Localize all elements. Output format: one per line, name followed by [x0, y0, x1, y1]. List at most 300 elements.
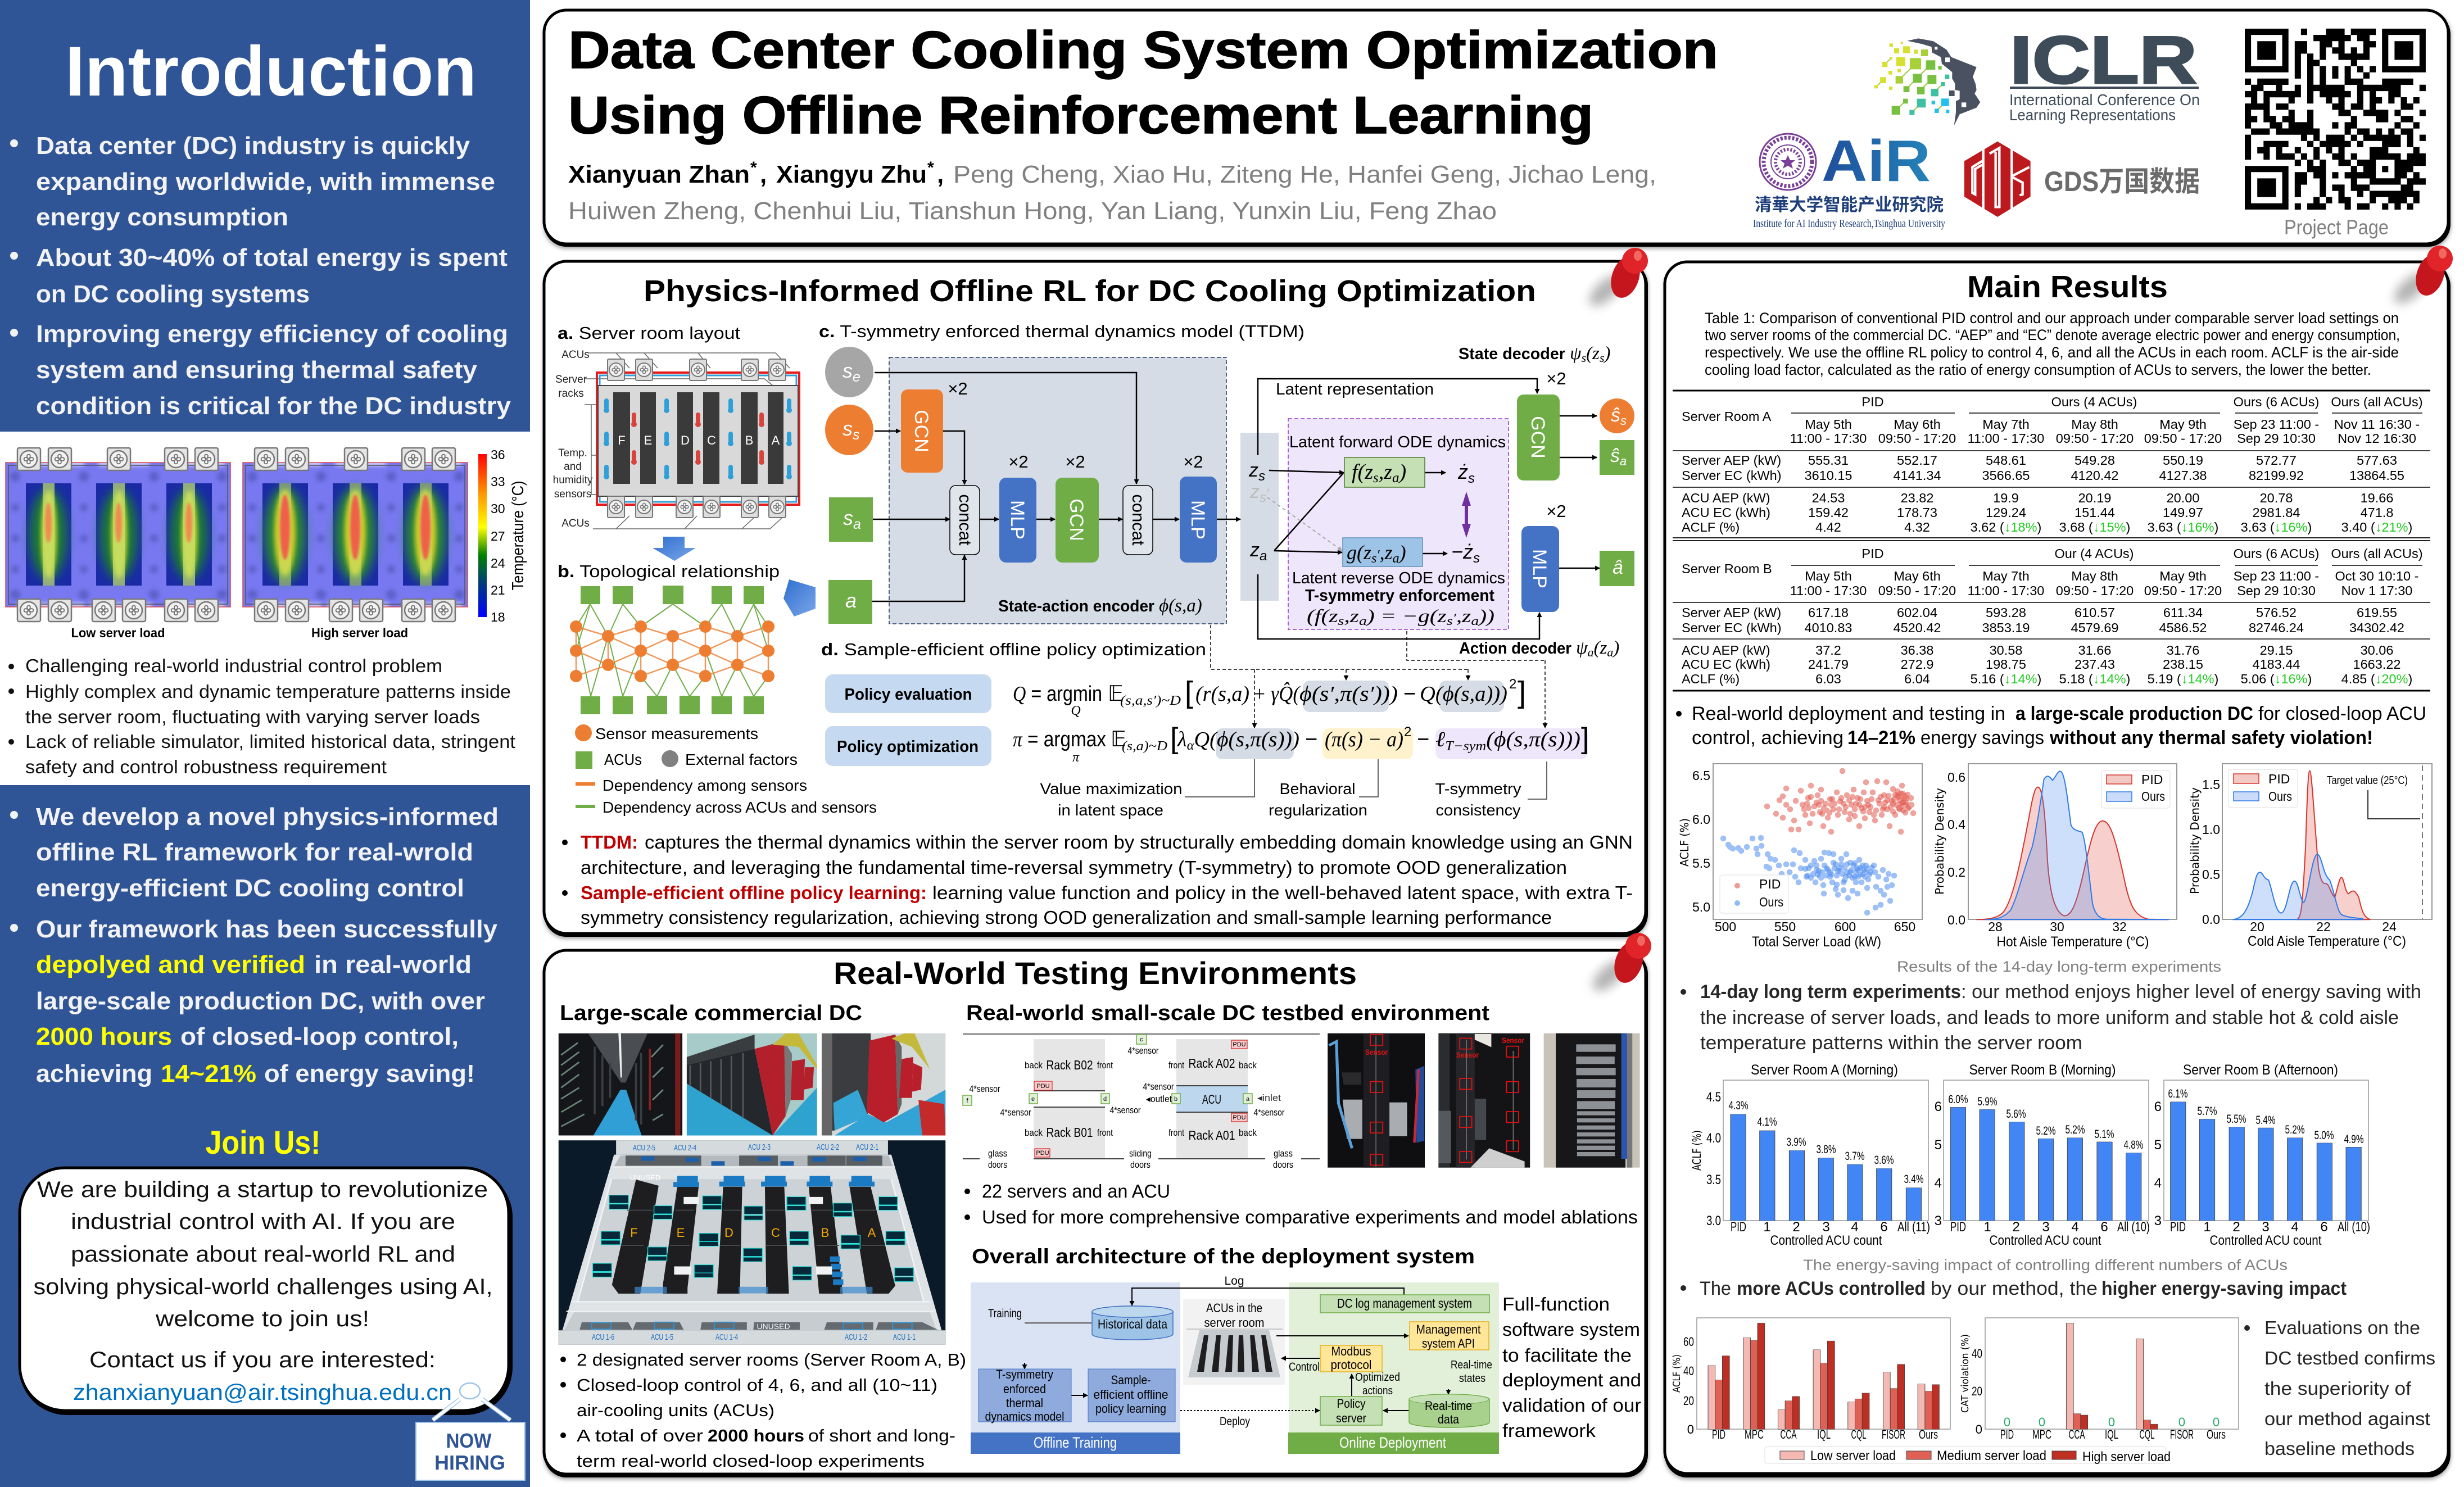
table: comparison: ACLF (%) — [1682, 672, 1740, 686]
box: g dynamics: g(z — [1347, 541, 1371, 564]
chart: CAT violation by method: 0 — [2213, 1415, 2220, 1429]
table: comparison: 5.18 (↓14%) — [2059, 672, 2130, 686]
chart: server room B afternoon bars: 6 — [2154, 1099, 2162, 1114]
box: policy server: Policy — [1337, 1397, 1366, 1411]
chart: TTDM architecture: s — [1620, 414, 1627, 428]
icon: red pin — [1584, 248, 1648, 311]
table: comparison: 09:50 - 17:20 — [2056, 431, 2134, 446]
chart: cold aisle temperature density: 20 — [2250, 919, 2264, 934]
table: comparison: 5.06 (↓16%) — [2241, 672, 2312, 686]
table: comparison: 3.63 (↓16%) — [2148, 520, 2218, 534]
chart: temperature colour bar: 18 — [491, 610, 505, 624]
text block: challenges bullets — [8, 655, 515, 777]
chart: temperature colour bar: 27 — [491, 529, 505, 543]
chart: hot aisle temperature density: 0.2 — [1947, 865, 1965, 879]
chart: testbed rack layout: front — [1168, 1060, 1184, 1071]
text block: table caption: cooling load factor, calculated as the ratio of energy consumption of ACUs to servers, the lower the better. — [1705, 361, 2371, 378]
label: latent reverse and T-symmetry: (f(z — [1307, 606, 1331, 627]
text block: full-function software system — [1502, 1294, 1641, 1441]
chart: TTDM architecture: s — [843, 506, 853, 529]
table: comparison: Ours (6 ACUs) — [2234, 395, 2319, 409]
text block: deployment result bullet: energy savings — [1921, 727, 2044, 749]
table: comparison: 30.58 — [1990, 643, 2022, 658]
chart: testbed rack layout: front — [1097, 1060, 1113, 1071]
text block: challenges bullets: Challenging real-world industrial control problem — [25, 655, 442, 676]
labels: flows: actions — [1362, 1385, 1393, 1397]
chart: ACLF by method: CQL — [1851, 1427, 1866, 1441]
chart: hot aisle temperature density — [1933, 764, 2177, 950]
labels: objective terms — [1040, 780, 1521, 819]
chart: hot aisle temperature density: 28 — [1988, 919, 2003, 934]
chart: server room B morning bars: 6 — [1935, 1099, 1942, 1114]
output node: action estimate — [1600, 551, 1634, 586]
text block: authors: , — [937, 161, 944, 188]
label: state decoder: s — [1582, 351, 1586, 365]
formula: policy evaluation — [1013, 676, 1526, 718]
label: state decoder: State decoder ψ — [1459, 343, 1582, 364]
chart: server room B afternoon bars — [2154, 1062, 2370, 1248]
labels: latent states — [1248, 460, 1270, 564]
box: T-symmetry model: enforced — [1003, 1382, 1046, 1396]
chart: CAT violation by method: 40 — [1972, 1347, 1982, 1361]
formula: policy evaluation: Q = argmin — [1013, 682, 1102, 706]
chart: TTDM architecture — [825, 343, 1634, 659]
chart: testbed rack layout: back — [1025, 1060, 1043, 1071]
chart: CAT violation by method: MPC — [2032, 1427, 2051, 1441]
chart: testbed rack layout: Rack B02 — [1047, 1058, 1093, 1072]
chart: TTDM architecture: s — [853, 427, 860, 443]
text block: TTDM and policy bullets: captures the thermal dynamics within the server room by structurally embedding domain knowledge using an GNN — [645, 832, 1633, 853]
chart: server room 3D render: A — [868, 1226, 876, 1240]
chart: testbed rack layout: ◂outlet — [1146, 1094, 1172, 1104]
chart: CAT violation by method — [1959, 1318, 2239, 1441]
text block: challenges bullets: safety and control robustness requirement — [25, 756, 387, 777]
chart: ACLF by method: 0 — [1687, 1422, 1694, 1436]
labels: objective terms: Value maximization — [1040, 780, 1183, 797]
labels: flows: Real-time — [1451, 1359, 1492, 1371]
text block: testbed evaluation bullet: DC testbed confirms — [2264, 1348, 2435, 1368]
heading: deployment architecture: Overall architecture of the deployment system — [972, 1245, 1475, 1268]
box: sample-efficient policy: Sample- — [1111, 1373, 1151, 1387]
chart: cold aisle temperature density: Target value (25°C) — [2327, 774, 2408, 787]
panel: physics-informed offline RL — [544, 248, 1648, 939]
chart: CAT violation by method: 0 — [1976, 1422, 1982, 1436]
labels: latent states: a — [1260, 548, 1267, 564]
chart: server room B morning bars: 5.6% — [2006, 1108, 2026, 1121]
table: comparison: May 8th — [2071, 569, 2118, 583]
chart: CAT violation by method: 20 — [1972, 1384, 1982, 1398]
labels: multiplicity: ×2 — [1183, 452, 1203, 472]
chart: server room layout: sensors — [554, 488, 591, 500]
text block: 14-day experiments bullet: 14-day long term experiments — [1700, 981, 1961, 1003]
chart: testbed rack layout: front — [1097, 1127, 1113, 1138]
table: comparison: 4120.42 — [2071, 468, 2118, 483]
panel: real-world testing environments — [544, 933, 1651, 1479]
formula: policy optimization: ϕ(s,π(s))) — [1217, 728, 1299, 751]
text block: deployment result bullet: control, achieving — [1692, 727, 1844, 749]
panel: latent ODE dynamics — [1288, 419, 1509, 629]
box: f dynamics — [1344, 457, 1425, 487]
text block: intro bullets: expanding worldwide, with immense — [36, 168, 495, 196]
chart: hot aisle temperature density: Ours — [2141, 789, 2165, 804]
box: T-symmetry model: thermal — [1006, 1396, 1043, 1410]
chart: server room layout: humidity — [553, 474, 593, 486]
table: comparison: 82746.24 — [2249, 620, 2304, 635]
label: action decoder: a — [1588, 645, 1594, 659]
chart: TTDM architecture: a — [853, 516, 861, 532]
table: comparison: 550.19 — [2163, 453, 2203, 468]
table: comparison: Ours (4 ACUs) — [2051, 395, 2137, 409]
chart: hot aisle temperature density: Hot Aisle Temperature (°C) — [1996, 934, 2149, 950]
chart: testbed rack layout: 4*sensor — [1127, 1045, 1159, 1056]
table: comparison: 237.43 — [2075, 657, 2115, 672]
chart: testbed rack layout: back — [1025, 1127, 1043, 1138]
text block: intro bullets: on DC cooling systems — [36, 280, 310, 308]
table: comparison: 11:00 - 17:30 — [1790, 583, 1867, 598]
table: comparison: 5.19 (↓14%) — [2148, 672, 2218, 686]
table: comparison: 572.77 — [2256, 453, 2297, 468]
table: comparison: 09:50 - 17:20 — [2144, 583, 2222, 598]
blocks: encoder and decoder networks: MLP — [1529, 549, 1550, 588]
legend: topology: Dependency across ACUs and sensors — [603, 799, 877, 816]
title — [568, 20, 1718, 144]
chart: testbed rack layout: front — [1168, 1127, 1184, 1138]
label: latent reverse and T-symmetry: )) — [1478, 606, 1494, 627]
formula: policy optimization — [1013, 722, 1589, 765]
chart: server room B morning bars: 1 — [1983, 1219, 1991, 1235]
chart: server room A morning bars: 4 — [1851, 1219, 1859, 1235]
label: latent reverse and T-symmetry: ,z — [1344, 606, 1359, 627]
panel: ACUs in server room: server room — [1204, 1316, 1265, 1330]
formula: policy evaluation: Q — [1071, 704, 1081, 718]
formula: policy evaluation: Q(ϕ(s,a))) — [1420, 682, 1507, 706]
table: comparison: 4586.52 — [2159, 620, 2207, 635]
box: g dynamics — [1343, 538, 1423, 566]
chart: testbed rack layout: back — [1239, 1060, 1257, 1071]
chart: ACLF vs total server load scatter: 6.0 — [1692, 812, 1710, 827]
title: Using Offline Reinforcement Learning — [568, 85, 1593, 144]
table: comparison: 20.00 — [2167, 491, 2199, 505]
chart: ACLF vs total server load scatter: ACLF (%) — [1678, 818, 1691, 867]
formula: policy optimization: − — [1417, 728, 1429, 751]
photos: testbed racks with sensors — [1328, 1033, 1640, 1168]
label: state decoder: (z — [1586, 343, 1600, 364]
table: comparison: 593.28 — [1986, 605, 2026, 620]
formula: policy optimization: (s,a)~D — [1122, 739, 1167, 754]
labels: multiplicity: ×2 — [948, 379, 968, 398]
formula: policy optimization: ] — [1581, 722, 1589, 755]
chart: deployment architecture diagram — [971, 1275, 1499, 1454]
chart: server room B morning bars: 5.9% — [1977, 1095, 1998, 1108]
text block: testbed evaluation bullet: the superiority of — [2264, 1378, 2412, 1399]
table: comparison: May 6th — [1894, 569, 1941, 583]
text block: full-function software system: Full-function — [1502, 1294, 1610, 1314]
text block: table caption: Table 1: Comparison of conventional PID control and our approach under comparable server load settings on — [1705, 310, 2399, 327]
table: comparison: 23.82 — [1901, 491, 1933, 505]
table: comparison: 36.38 — [1901, 643, 1933, 658]
text block: contributions: 2000 hours — [36, 1023, 172, 1050]
heading: Introduction: Introduction — [65, 33, 477, 111]
table: comparison: Ours (all ACUs) — [2331, 395, 2423, 409]
box: g dynamics: ) — [1398, 541, 1406, 564]
text block: testbed evaluation bullet: our method against — [2264, 1408, 2430, 1429]
labels: latent states: s — [1260, 490, 1266, 505]
text block: TTDM and policy bullets: TTDM: — [581, 832, 638, 853]
chart: server room layout: racks — [558, 388, 584, 400]
text block: intro bullets: condition is critical for the DC industry — [36, 392, 511, 420]
chart: ACLF vs total server load scatter: PID — [1759, 877, 1781, 891]
chart: server room 3D render: ACU 2-1 — [856, 1143, 878, 1152]
labels: multiplicity: ×2 — [1546, 501, 1566, 521]
blocks: encoder and decoder networks: MLP — [1007, 500, 1028, 540]
chart: ACLF by method: Ours — [1919, 1427, 1938, 1441]
table: comparison: 602.04 — [1897, 605, 1937, 620]
text block: deployment result bullet — [1676, 703, 2426, 749]
table: comparison: 11:00 - 17:30 — [1968, 583, 2044, 598]
chart: server room B afternoon bars: 5.5% — [2227, 1113, 2246, 1126]
box: T-symmetry model — [979, 1367, 1071, 1423]
text block: contributions: 14~21% — [161, 1060, 256, 1087]
text block: testbed bullets: Used for more comprehensive comparative experiments and model ablations — [982, 1207, 1638, 1227]
table: comparison: Nov 11 16:30 - — [2334, 417, 2420, 432]
chart: server room B afternoon bars: 5.7% — [2198, 1105, 2217, 1118]
chart: server room A morning bars: 3.8% — [1817, 1143, 1836, 1156]
table: comparison: ACLF (%) — [1682, 520, 1740, 534]
chart: cold aisle temperature density: Probability Density — [2188, 787, 2202, 894]
chart: ACLF by method: 60 — [1683, 1335, 1694, 1349]
chart: server room 3D render: ACU 1-4 — [715, 1332, 738, 1342]
chart: server room B morning bars: All (10) — [2117, 1219, 2150, 1235]
chart: server room B morning bars: 2 — [2012, 1219, 2020, 1235]
text block: deployment result bullet: a large-scale production DC — [2015, 703, 2253, 724]
box: management API: system API — [1422, 1336, 1475, 1350]
icon: AIR logo: AiR — [1822, 129, 1931, 194]
chart: server room 3D render: UNUSED — [757, 1322, 790, 1331]
table: comparison: ACU AEP (kW) — [1682, 491, 1770, 505]
chart: CAT violation by method: IQL — [2105, 1427, 2118, 1441]
table: comparison: 1663.22 — [2353, 657, 2400, 672]
chart: ACLF by method: IQL — [1817, 1427, 1831, 1441]
chart: server room B afternoon bars: 1 — [2203, 1219, 2211, 1235]
chart: server room layout: and — [564, 461, 582, 473]
heading: d. policy optimization: d. Sample-efficient offline policy optimization — [821, 640, 1206, 659]
icon: ICLR brain logo — [1874, 38, 1980, 125]
chart: ACLF by method — [1671, 1318, 1950, 1441]
heading: physics panel title: Physics-Informed Offline RL for DC Cooling Optimization — [644, 274, 1536, 308]
chart: cold aisle temperature density: 0.0 — [2202, 912, 2220, 927]
chart: testbed rack layout: PDU — [1233, 1114, 1246, 1121]
text block: testbed bullets — [964, 1181, 1638, 1227]
text block: contributions: of closed-loop control, — [180, 1023, 459, 1050]
table: comparison: 5.16 (↓14%) — [1971, 672, 2041, 686]
chart: hot aisle temperature density: Probability Density — [1933, 788, 1946, 895]
chart: cold aisle temperature density: 1.0 — [2202, 822, 2220, 837]
table: comparison: Nov 12 16:30 — [2338, 431, 2416, 446]
table: comparison: May 6th — [1894, 417, 1941, 432]
legend: topology: External factors — [685, 751, 798, 768]
chart: server room 3D render: ACU 2-3 — [748, 1143, 771, 1152]
table: comparison: 09:50 - 17:20 — [1878, 583, 1956, 598]
chart: testbed rack layout: PDU — [1036, 1150, 1049, 1157]
chart: testbed rack layout: 4*sensor — [969, 1083, 1000, 1094]
chart: cold aisle temperature density: 24 — [2382, 919, 2397, 934]
chart: server room B morning bars: 3 — [2042, 1219, 2050, 1235]
table: comparison: 577.63 — [2357, 453, 2397, 468]
icon: GDS logo — [1964, 142, 2200, 217]
text block: contributions: We develop a novel physics-informed — [36, 803, 499, 831]
title: Data Center Cooling System Optimization — [568, 20, 1718, 79]
blocks: encoder and decoder networks — [901, 389, 1560, 612]
text block: authors: Huiwen Zheng, Chenhui Liu, Tianshun Hong, Yan Liang, Yunxin Liu, Feng Zhao — [568, 197, 1497, 225]
chart: cold aisle temperature density: 0.5 — [2202, 867, 2220, 882]
table: comparison: 548.61 — [1986, 453, 2026, 468]
table: comparison: May 9th — [2159, 417, 2207, 432]
table: comparison: Sep 29 10:30 — [2237, 583, 2316, 598]
icon: GDS logo: GDS万国数据 — [2044, 166, 2200, 197]
text block: contributions: in real-world — [314, 951, 472, 978]
chart: testbed rack layout: doors — [988, 1159, 1007, 1170]
formula: policy evaluation: ϕ(s′,π(s′))) — [1299, 682, 1398, 706]
panel: title header — [544, 10, 2451, 248]
blocks: encoder and decoder networks: MLP — [1187, 500, 1208, 540]
chart: server room 3D render: ACU 2-5 — [633, 1143, 655, 1153]
icon: ICLR wordmark: International Conference On — [2009, 91, 2200, 108]
label: latent forward ODE: Latent forward ODE dynamics — [1289, 433, 1506, 451]
chart: TTDM architecture: a — [1620, 454, 1627, 468]
chart: low server load heatmap — [6, 448, 230, 640]
chart: server room A morning bars: 3.5 — [1706, 1172, 1721, 1187]
text block: commercial DC bullets: A total of over — [577, 1426, 703, 1445]
formula: policy optimization: [ — [1170, 722, 1179, 755]
labels: objective terms: T-symmetry — [1435, 780, 1521, 797]
labels: latent derivatives — [1451, 460, 1480, 566]
formula: policy evaluation: [ — [1185, 676, 1193, 709]
chart: server room B afternoon bars: 4 — [2291, 1219, 2299, 1235]
blocks: encoder and decoder networks: GCN — [1066, 498, 1087, 541]
text block: intro bullets: system and ensuring thermal safety — [36, 356, 478, 384]
table: comparison: 3.40 (↓21%) — [2341, 520, 2412, 534]
chart: CAT violation by method: 0 — [2039, 1415, 2045, 1429]
chart: server room B afternoon bars: 3 — [2154, 1213, 2162, 1228]
caption: 14-day results: Results of the 14-day long-term experiments — [1897, 958, 2221, 975]
box: sample-efficient policy: efficient offline — [1094, 1388, 1168, 1402]
callout: startup recruiting box: industrial control with AI. If you are — [71, 1209, 455, 1234]
labels: flows: Deploy — [1220, 1415, 1250, 1428]
chart: server room A morning bars: 3 — [1822, 1219, 1830, 1235]
heading: b. topological relationship: b. Topological relationship — [558, 561, 780, 581]
callout: startup recruiting box: welcome to join us! — [155, 1307, 369, 1331]
table: comparison: 549.28 — [2075, 453, 2115, 468]
chart: CAT violation by method: PID — [2000, 1427, 2014, 1441]
chart: topology graph — [570, 586, 774, 714]
chart: server room A morning bars: Server Room A (Morning) — [1751, 1062, 1898, 1078]
box: policy evaluation: Policy evaluation — [844, 686, 972, 704]
chart: server room B afternoon bars: PID — [2170, 1219, 2186, 1235]
table: comparison: 241.79 — [1808, 657, 1849, 672]
box: DC log management: DC log management system — [1337, 1296, 1472, 1311]
box: f dynamics: ) — [1398, 460, 1406, 484]
table: comparison: 178.73 — [1897, 505, 1937, 520]
chart: temperature colour bar: 33 — [491, 474, 505, 489]
table: comparison: 4183.44 — [2253, 657, 2300, 672]
chart: server room A morning bars: 3.7% — [1845, 1150, 1865, 1163]
label: latent reverse and T-symmetry: s — [1338, 614, 1344, 628]
table: comparison: 20.19 — [2078, 491, 2111, 505]
table: comparison: 4127.38 — [2159, 468, 2207, 483]
text block: authors: Xianyuan Zhan — [568, 161, 750, 188]
table: comparison: 3853.19 — [1982, 620, 2030, 635]
chart: ACLF by method: FISOR — [1882, 1427, 1905, 1441]
table: comparison: Server Room B — [1682, 561, 1772, 576]
legend: topology: ACUs — [604, 751, 642, 768]
callout: startup recruiting box: passionate about real-world RL and — [71, 1242, 455, 1267]
text block: contributions: offline RL framework for real-wrold — [36, 838, 473, 866]
heading: main results: Main Results — [1967, 269, 2168, 304]
chart: cold aisle temperature density: PID — [2268, 772, 2290, 786]
labels: latent derivatives: −ż — [1451, 540, 1473, 563]
chart: CAT violation by method: Ours — [2207, 1427, 2226, 1441]
chart: temperature colour bar: 36 — [491, 447, 505, 462]
table: comparison: 3.62 (↓18%) — [1971, 520, 2041, 534]
text block: more ACUs bullet: by our method, the — [1931, 1278, 2098, 1299]
panel: offline training: Offline Training — [1034, 1434, 1117, 1451]
text block: challenges bullets: Lack of reliable simulator, limited historical data, stringent — [25, 731, 515, 752]
label: latent reverse and T-symmetry — [1292, 569, 1505, 628]
photos: testbed racks with sensors: Sensor — [1456, 1050, 1479, 1059]
icon: AIR logo: 清華大学智能产业研究院 — [1755, 195, 1944, 215]
chart: temperature colour bar: 30 — [491, 501, 505, 516]
table: comparison: 610.57 — [2075, 605, 2115, 620]
formula: policy evaluation: ] — [1518, 676, 1526, 709]
table: comparison: 129.24 — [1986, 505, 2026, 520]
formula: policy optimization: 2 — [1404, 724, 1411, 740]
formula: policy evaluation: + γQ̂( — [1253, 682, 1301, 706]
labels: latent states: s — [1258, 469, 1265, 484]
chart: cold aisle temperature density: Cold Aisle Temperature (°C) — [2248, 933, 2406, 949]
table: comparison: 13864.55 — [2349, 468, 2404, 483]
text block: authors: * — [927, 158, 934, 177]
chart: ACLF vs total server load scatter: 550 — [1774, 919, 1796, 934]
text block: TTDM and policy bullets — [562, 832, 1633, 928]
table: comparison: 31.66 — [2078, 643, 2111, 658]
chart: testbed rack layout: Rack A02 — [1188, 1056, 1235, 1071]
chart: ACLF vs total server load scatter: 600 — [1835, 919, 1856, 934]
formula: policy optimization: π = argmax — [1013, 728, 1106, 751]
text block: intro bullets: About 30~40% of total energy is spent — [36, 244, 508, 271]
chart: testbed rack layout: a — [1246, 1096, 1250, 1103]
chart: TTDM architecture: e — [853, 369, 860, 385]
blocks: encoder and decoder networks: GCN — [911, 410, 932, 452]
chart: hot aisle temperature density: 30 — [2050, 919, 2064, 934]
chart: TTDM architecture: ŝ — [1610, 445, 1620, 466]
chart: testbed rack layout: ACU — [1202, 1092, 1221, 1107]
icon: real-time data cylinder: data — [1438, 1412, 1460, 1426]
table: comparison: 4010.83 — [1805, 620, 1852, 635]
chart: server room layout: ACUs — [561, 349, 590, 361]
chart: testbed rack layout: doors — [1273, 1159, 1293, 1170]
chart: server room B afternoon bars: 3 — [2262, 1219, 2270, 1235]
formula: policy evaluation: 2 — [1509, 677, 1516, 692]
icon: historical data cylinder — [1092, 1306, 1173, 1340]
photos: commercial DC — [559, 1033, 945, 1135]
chart: server room A morning bars: 1 — [1763, 1219, 1771, 1235]
chart: server room layout: ACUs — [561, 518, 590, 529]
table: comparison: 19.66 — [2361, 491, 2393, 505]
table: comparison: Our (4 ACUs) — [2054, 546, 2134, 561]
table: comparison: 272.9 — [1901, 657, 1933, 672]
legend: server load levels: High server load — [2082, 1449, 2171, 1465]
table: comparison: 3.68 (↓15%) — [2059, 520, 2130, 534]
